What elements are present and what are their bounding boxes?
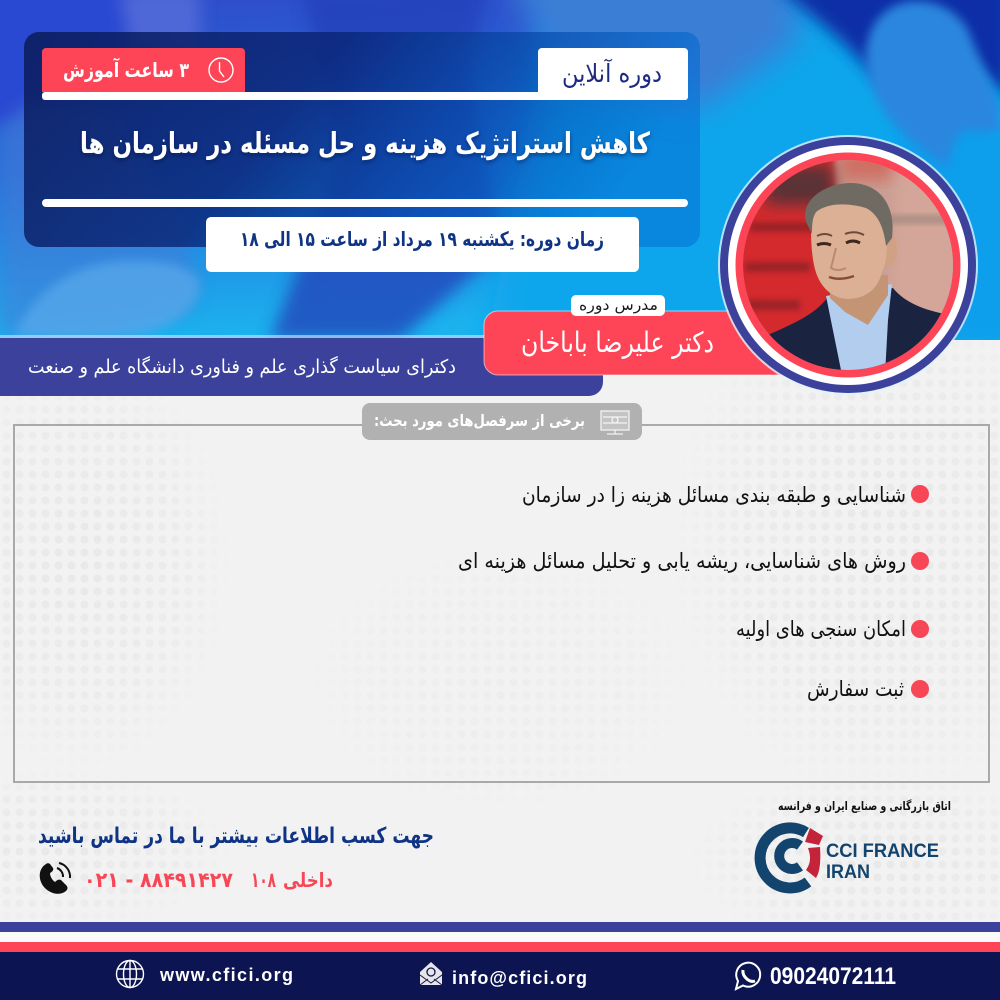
badge: course instructor: مدرس دوره	[579, 296, 658, 314]
contact phone: ۱۰۸	[251, 868, 276, 892]
shirt	[826, 284, 892, 375]
icon: presentation screen	[601, 411, 629, 434]
heading pill	[362, 403, 642, 440]
contact heading: جهت کسب اطلاعات بیشتر با ما در تماس باشید	[38, 824, 434, 849]
topic 3: امکان سنجی های اولیه	[736, 617, 906, 641]
hair	[805, 183, 893, 246]
header background photo	[0, 0, 1000, 340]
instructor name	[484, 311, 790, 375]
footer stripes	[0, 922, 1000, 952]
icon: globe	[116, 960, 144, 988]
logo: CCI France Iran	[760, 799, 951, 888]
panel: course info	[24, 32, 700, 247]
top divider bar	[42, 92, 688, 100]
contact phone	[40, 863, 333, 894]
icon: email	[420, 962, 442, 985]
heading pill: برخی از سرفصل‌های مورد بحث:	[374, 411, 585, 430]
face	[811, 195, 887, 299]
icon: phone	[40, 863, 70, 894]
label tab: online course	[538, 48, 688, 100]
title: کاهش استراتژیک هزینه و حل مسئله در سازمان ها	[80, 126, 650, 160]
panel: topics box	[14, 403, 989, 782]
email address: info@cfici.org	[452, 968, 587, 988]
topic 4: ثبت سفارش	[807, 677, 904, 701]
panel: instructor credentials band	[0, 338, 603, 396]
tag: course hours	[42, 48, 245, 92]
icon: clock	[209, 58, 233, 82]
neck	[830, 275, 888, 325]
bottom divider bar	[42, 199, 688, 207]
panel: instructor credentials band: دکترای سیاست گذاری علم و فناوری دانشگاه علم و صنعت	[28, 355, 456, 378]
badge: course instructor	[571, 295, 665, 316]
portrait	[718, 135, 978, 395]
logo: CCI France Iran: IRAN	[826, 862, 870, 883]
contact phone: داخلی	[283, 868, 333, 892]
phone number: 09024072111	[770, 963, 896, 990]
icon: whatsapp	[736, 963, 760, 989]
suit	[769, 288, 942, 370]
website: www.cfici.org	[159, 965, 293, 985]
label tab: online course: دوره آنلاین	[562, 58, 662, 89]
date box: زمان دوره: یکشنبه ۱۹ مرداد از ساعت ۱۵ الی ۱۸	[240, 227, 604, 251]
ear	[886, 235, 897, 266]
logo mark	[760, 828, 823, 888]
eyes and mouth	[817, 241, 860, 245]
topic 1: شناسایی و طبقه بندی مسائل هزینه زا در سازمان	[522, 483, 906, 507]
date box	[206, 217, 639, 272]
logo: CCI France Iran: CCI FRANCE	[826, 841, 939, 862]
tag: course hours: ۳ ساعت آموزش	[63, 57, 189, 82]
footer bar	[0, 952, 1000, 1000]
logo: CCI France Iran: اتاق بازرگانی و صنایع ایران و فرانسه	[778, 799, 951, 814]
instructor name: دکتر علیرضا باباخان	[521, 326, 714, 359]
halftone dot texture	[8, 445, 954, 888]
contact phone: ۰۲۱ - ۸۸۴۹۱۴۲۷	[84, 868, 233, 892]
topic 2: روش های شناسایی، ریشه یابی و تحلیل مسائل هزینه ای	[458, 549, 906, 573]
